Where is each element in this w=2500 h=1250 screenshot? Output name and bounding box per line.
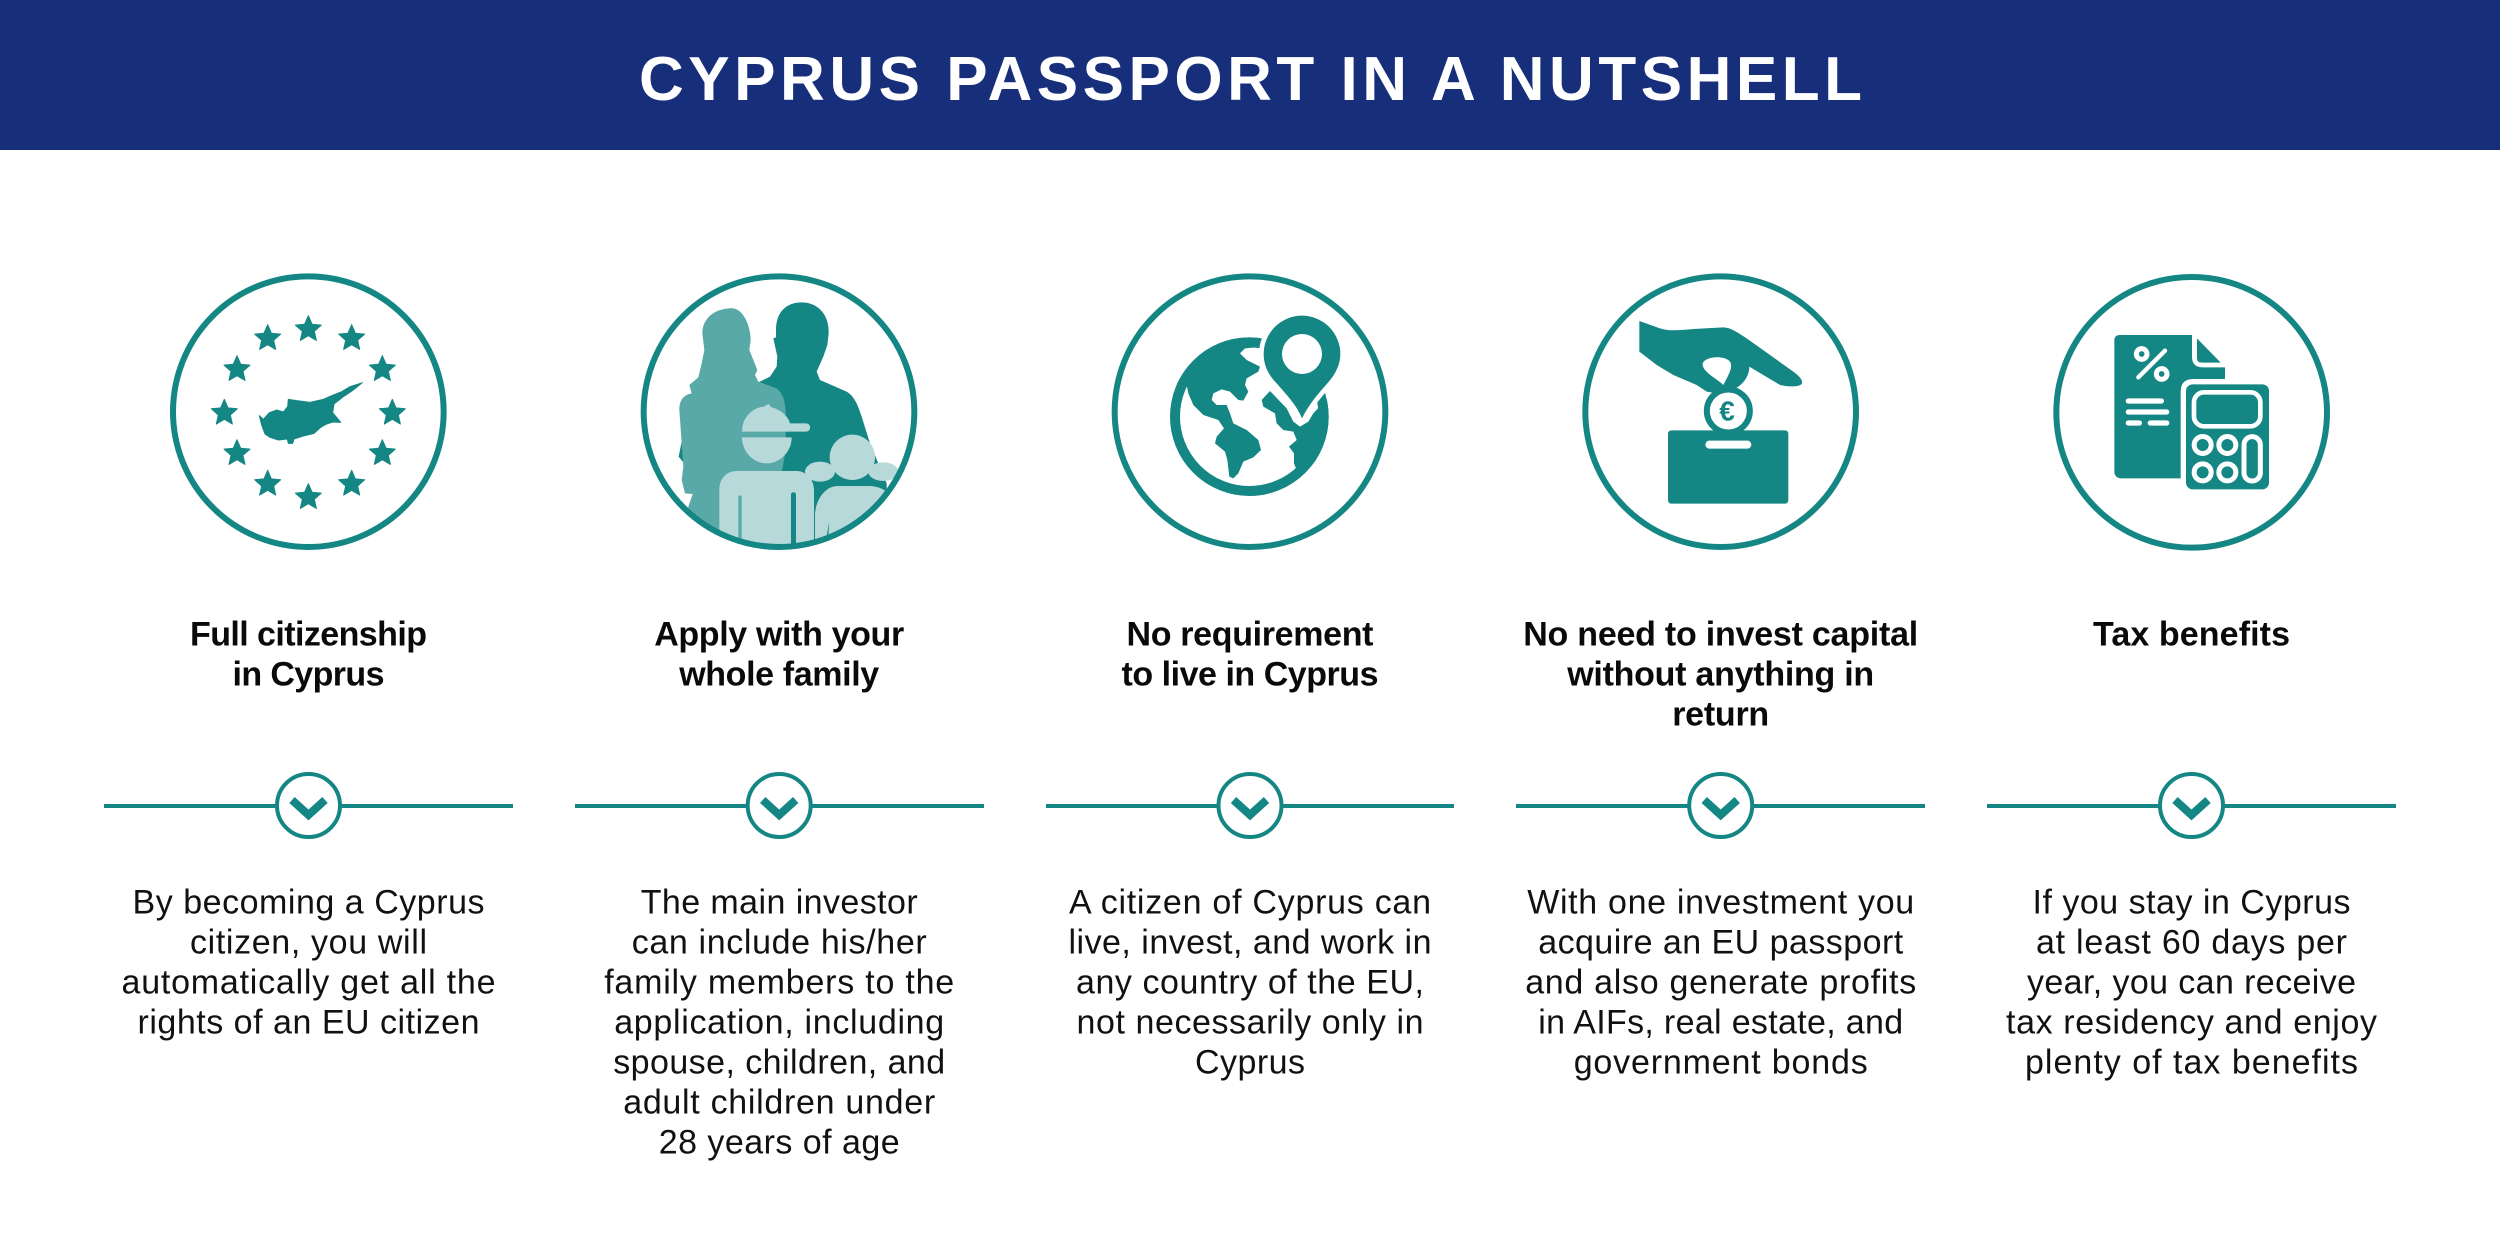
heading: whole family [678, 656, 879, 694]
body text: can include his/her [632, 924, 927, 962]
heading: in Cyprus [232, 656, 384, 694]
divider with chevron [1516, 774, 1925, 837]
body text: family members to the [604, 964, 954, 1002]
divider with chevron [575, 774, 984, 837]
body text: at least 60 days per [2036, 924, 2347, 962]
body text: If you stay in Cyprus [2032, 884, 2350, 922]
icon: hand dropping euro coin into box: € [1719, 395, 1735, 426]
body text: adult children under [623, 1084, 935, 1122]
header banner [0, 0, 2500, 150]
panel: whole family [575, 276, 984, 1162]
body text: government bonds [1574, 1044, 1868, 1082]
body text: not necessarily only in [1076, 1004, 1424, 1042]
body text: and also generate profits [1525, 964, 1916, 1002]
divider with chevron [1046, 774, 1454, 837]
body text: plenty of tax benefits [2025, 1044, 2358, 1082]
body text: rights of an EU citizen [138, 1004, 480, 1042]
panel: tax benefits [1987, 277, 2396, 1081]
panel: full citizenship [104, 276, 513, 1042]
body text: citizen, you will [190, 924, 427, 962]
heading: without anything in [1566, 656, 1874, 694]
icon: Cyprus map with EU stars [173, 276, 444, 547]
body text [122, 884, 496, 1042]
icon: family silhouettes [644, 276, 914, 550]
panel: no need to invest capital [1516, 276, 1925, 1082]
divider with chevron [104, 774, 513, 837]
body text: A citizen of Cyprus can [1069, 884, 1431, 922]
body text: live, invest, and work in [1068, 924, 1432, 962]
body text: By becoming a Cyprus [132, 884, 484, 922]
heading: to live in Cyprus [1122, 656, 1378, 694]
heading [1523, 616, 1918, 734]
body text [1068, 884, 1432, 1082]
heading: No need to invest capital [1523, 616, 1918, 654]
body text [2006, 884, 2377, 1082]
icon: tax document and calculator [2056, 277, 2327, 548]
heading [654, 616, 904, 694]
body text: spouse, children, and [613, 1044, 945, 1082]
title: CYPRUS PASSPORT IN A NUTSHELL [639, 45, 1862, 114]
body text: With one investment you [1527, 884, 1914, 922]
icon: hand dropping euro coin into box [1585, 276, 1856, 547]
body text: year, you can receive [2027, 964, 2356, 1002]
heading [190, 616, 427, 694]
heading: Full citizenship [190, 616, 427, 654]
heading: Tax benefits [2093, 616, 2290, 654]
body text: automatically get all the [122, 964, 496, 1002]
divider with chevron [1987, 774, 2396, 837]
body text: acquire an EU passport [1538, 924, 1904, 962]
body text: any country of the EU, [1076, 964, 1424, 1002]
body text: 28 years of age [659, 1124, 900, 1162]
body text: tax residency and enjoy [2006, 1004, 2377, 1042]
body text: Cyprus [1195, 1044, 1305, 1082]
body text [604, 884, 954, 1162]
heading: Apply with your [654, 616, 904, 654]
panel: no requirement to live [1046, 276, 1454, 1082]
body text: application, including [614, 1004, 944, 1042]
heading: return [1672, 696, 1769, 734]
body text: in AIFs, real estate, and [1538, 1004, 1903, 1042]
body text [1525, 884, 1916, 1082]
icon: globe with location pin [1115, 276, 1385, 547]
heading: No requirement [1126, 616, 1374, 654]
heading [1122, 616, 1378, 694]
body text: The main investor [641, 884, 918, 922]
